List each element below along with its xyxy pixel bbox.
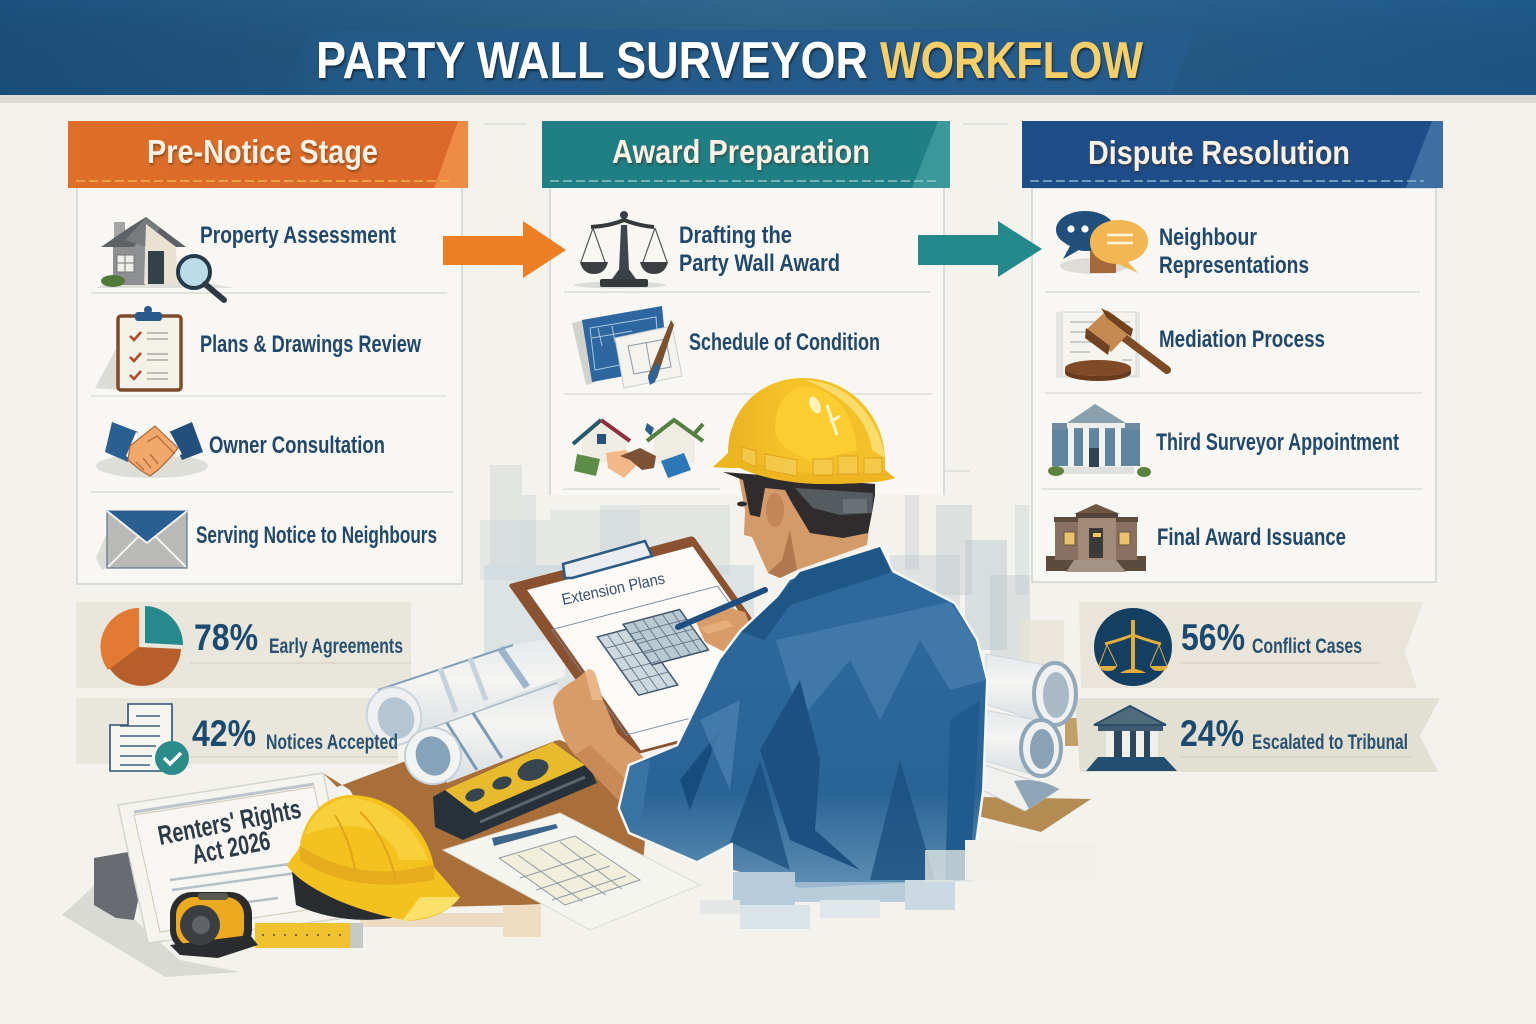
label: schedule of condition: Schedule of Condition	[689, 329, 880, 356]
banner: pre-notice stage	[68, 121, 468, 188]
stat: 24% escalated to tribunal	[1075, 698, 1440, 772]
panel body	[77, 187, 462, 584]
tape measure	[170, 892, 363, 958]
icon: speech bubbles	[1056, 211, 1148, 274]
clipboard with plans	[508, 536, 815, 756]
skyline backdrop	[480, 465, 1064, 715]
icon: tribunal building	[1086, 706, 1177, 771]
label: notices accepted: Notices Accepted	[266, 731, 398, 754]
icon: handshake	[96, 422, 208, 478]
label: property assessment: Property Assessment	[200, 222, 396, 249]
header banner	[0, 0, 1536, 103]
icon: accepted document	[110, 704, 189, 775]
desk surface	[323, 718, 1096, 937]
label: drafting the party wall award: Party Wall Award	[679, 250, 840, 277]
arrow: orange flow	[443, 221, 566, 278]
label: owner consultation: Owner Consultation	[209, 432, 385, 459]
panel body	[1032, 188, 1436, 582]
stat: 56% conflict cases: 56%	[1181, 617, 1245, 658]
arrow: teal flow	[918, 221, 1042, 277]
surveyor figure	[508, 378, 986, 888]
worker hard hat	[713, 378, 895, 484]
panel: pre-notice stage	[68, 121, 468, 584]
title: PARTY WALL SURVEYOR	[316, 32, 868, 90]
stat: 56% conflict cases: Conflict Cases	[1252, 635, 1362, 658]
icon: scales of justice	[574, 211, 668, 288]
banner: dispute resolution: Dispute Resolution	[1088, 134, 1350, 171]
stat: 78% early agreements	[76, 602, 411, 688]
stat: 42% notices accepted	[76, 698, 398, 775]
floor plan sheet on desk	[443, 813, 700, 930]
icon: gold scales badge	[1094, 608, 1172, 686]
stat: 42% notices accepted: 42%	[192, 713, 256, 754]
banner: pre-notice stage: Pre-Notice Stage	[147, 133, 378, 170]
clipboard heading: Extension Plans	[560, 570, 667, 609]
neck and face	[739, 470, 872, 578]
label: drafting the party wall award: Drafting the	[679, 222, 792, 249]
stat: 78% early agreements: Early Agreements	[269, 635, 403, 658]
icon: blueprints and pencil	[572, 306, 682, 388]
rolled plans right	[976, 654, 1076, 811]
hair and headband	[723, 472, 875, 538]
title: WORKFLOW	[880, 32, 1144, 90]
label: drafting the party wall award	[679, 222, 840, 277]
renters' rights document: Renters' Rights	[155, 794, 303, 851]
icon: neighbouring houses and handshake	[573, 420, 703, 478]
renters' rights document	[62, 773, 353, 977]
renters' rights document: Act 2026	[189, 825, 273, 870]
shirt	[620, 547, 986, 888]
icon: final award building	[1046, 504, 1146, 572]
label: mediation process: Mediation Process	[1159, 326, 1325, 353]
hard hat on desk	[287, 795, 460, 921]
icon: clipboard checklist	[95, 306, 181, 390]
spirit level	[433, 742, 597, 840]
stat: 24% escalated to tribunal: Escalated to Tribunal	[1252, 731, 1408, 754]
label: neighbour representations	[1159, 224, 1309, 279]
banner: dispute resolution	[1022, 121, 1443, 188]
panel: dispute resolution	[1022, 121, 1443, 582]
banner: award preparation: Award Preparation	[612, 133, 870, 170]
hand with pen	[678, 590, 765, 660]
label: neighbour representations: Representations	[1159, 252, 1309, 279]
forearm and hand holding clipboard	[553, 669, 650, 802]
stat: 78% early agreements: 78%	[194, 617, 258, 658]
icon: gavel on documents	[1056, 308, 1167, 381]
icon: envelope	[96, 511, 187, 570]
panel body	[551, 188, 944, 495]
label: third surveyor appointment: Third Surveyor Appointment	[1156, 429, 1399, 456]
rolled plans left	[359, 636, 565, 792]
stat: 24% escalated to tribunal: 24%	[1180, 713, 1244, 754]
banner: award preparation	[542, 121, 950, 188]
faded paint fragments	[700, 840, 1013, 929]
label: serving notice to neighbours: Serving Notice to Neighbours	[196, 522, 437, 549]
icon: house with magnifier	[96, 217, 235, 300]
pie chart	[100, 606, 183, 686]
stat: 56% conflict cases	[1079, 602, 1423, 688]
panel: award preparation	[542, 121, 950, 495]
icon: columned building	[1048, 404, 1151, 477]
label: final award issuance: Final Award Issuance	[1157, 524, 1346, 551]
label: neighbour representations: Neighbour	[1159, 224, 1257, 251]
label: plans and drawings review: Plans & Drawings Review	[200, 331, 421, 358]
